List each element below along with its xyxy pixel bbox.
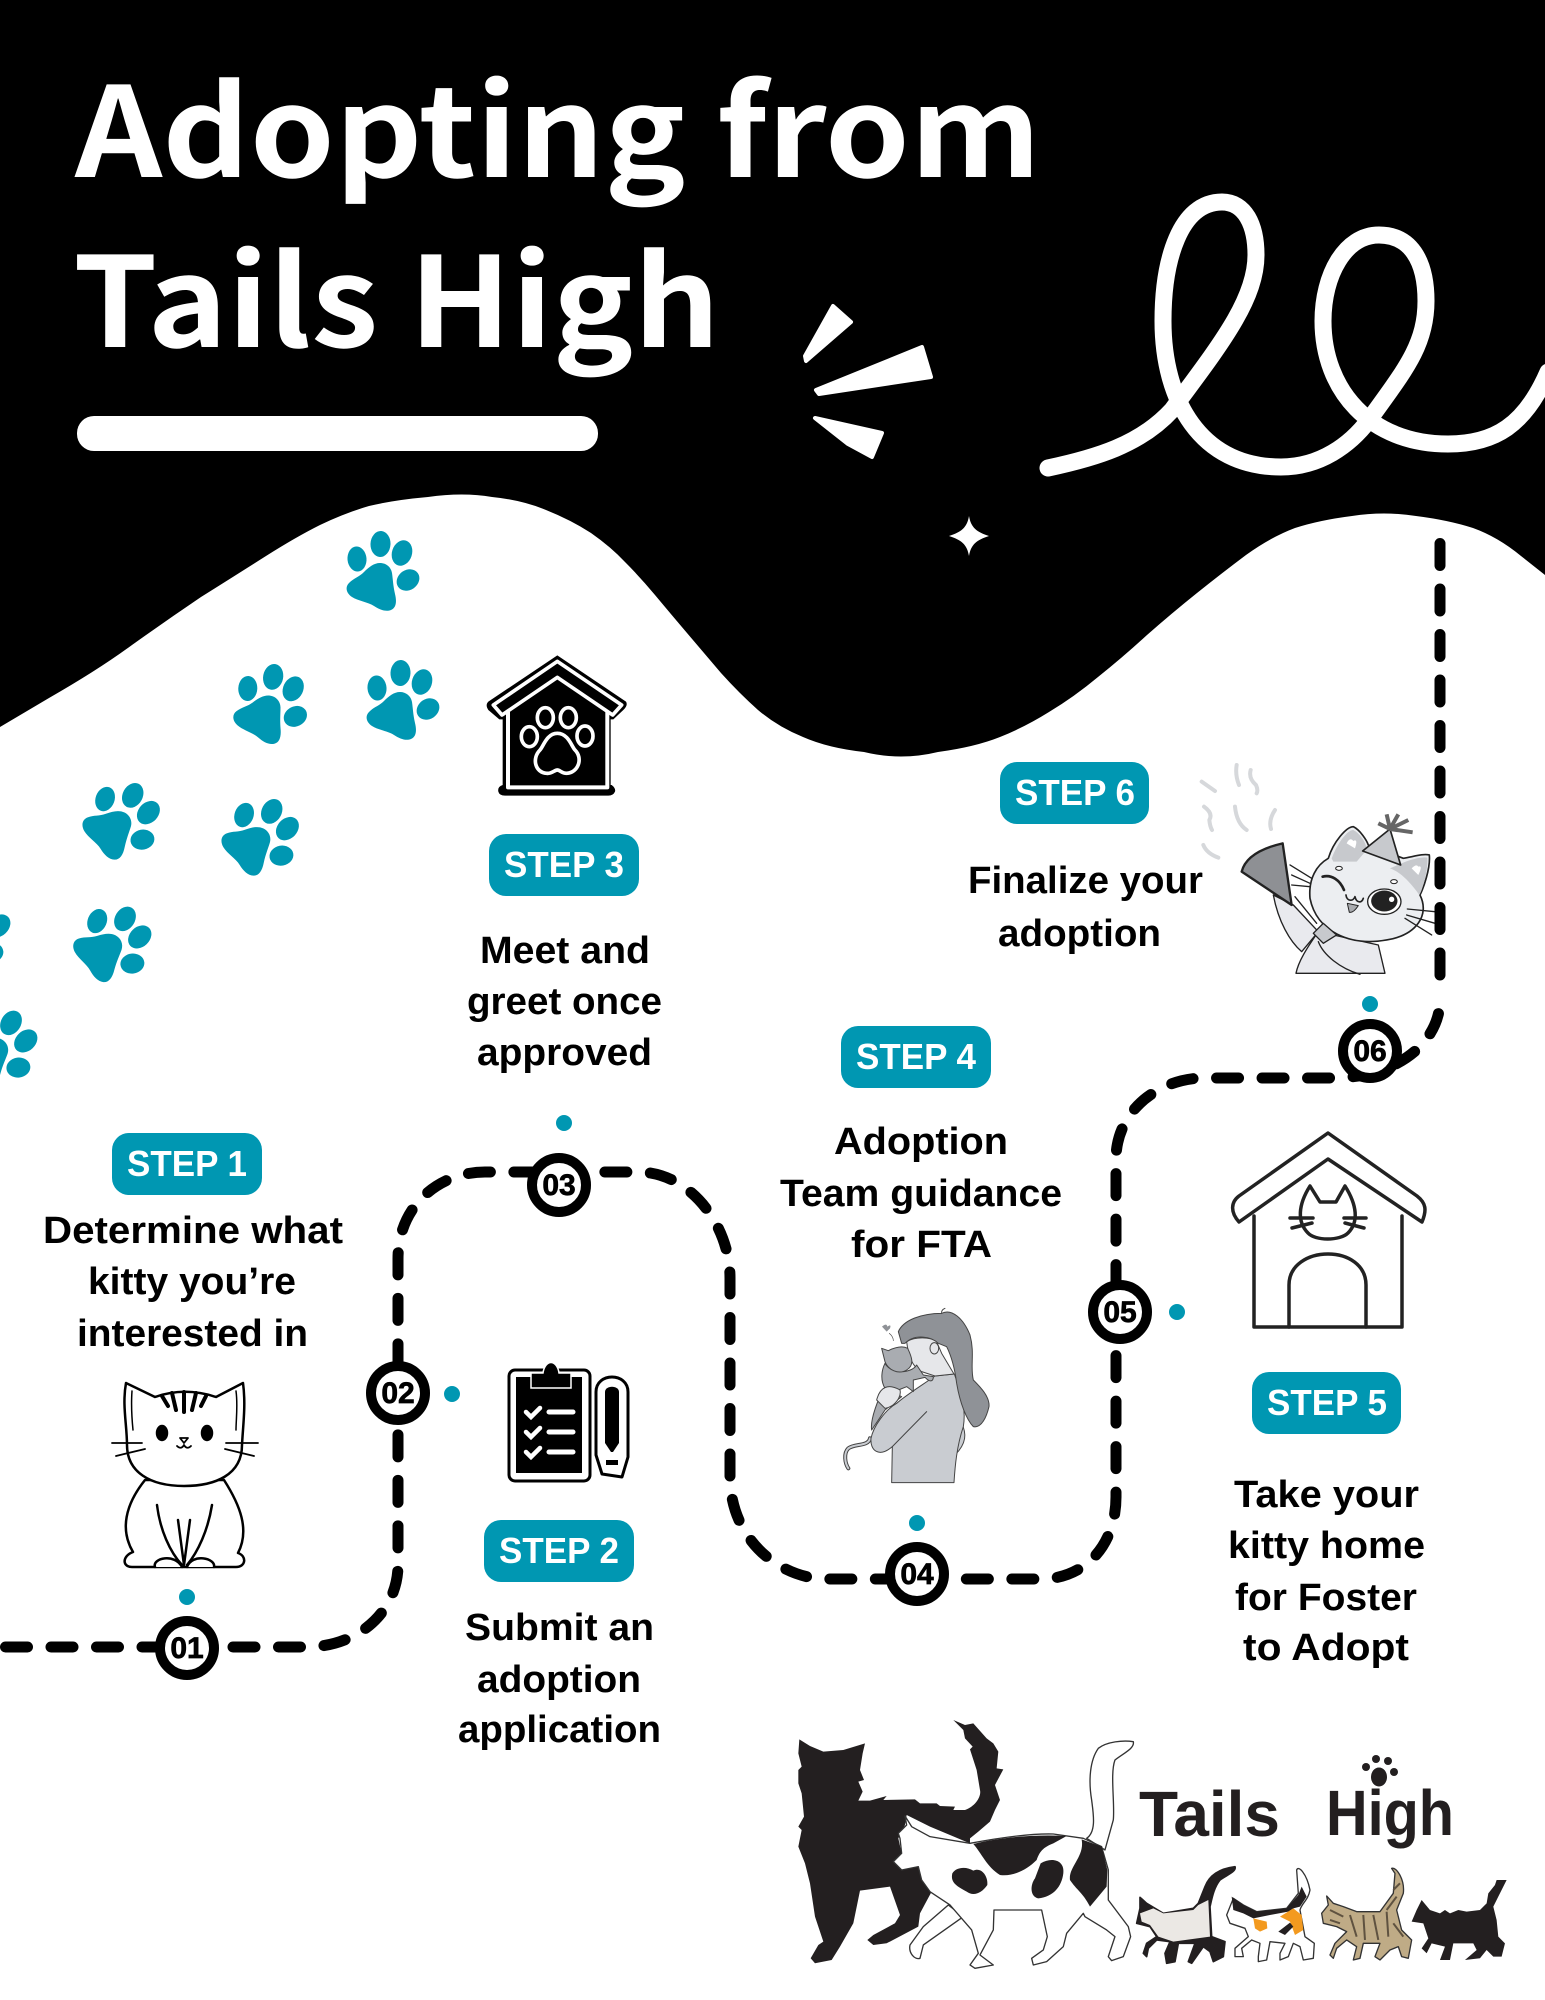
icon: step 1 kitten [112, 1383, 258, 1567]
step 4 badge [841, 1026, 991, 1088]
step 1 badge: STEP 1 [127, 1143, 247, 1184]
step 3 text: Meet and [480, 930, 650, 972]
node dot 04 [909, 1515, 925, 1531]
node 01 [160, 1621, 214, 1675]
step 1 text: kitty you’re [88, 1261, 296, 1303]
step 2 text: Submit an [465, 1607, 654, 1649]
title: Adopting from [74, 32, 1041, 213]
step 5 text: Take your [1234, 1474, 1419, 1516]
step 2 text: application [458, 1709, 661, 1751]
step 5 text: to Adopt [1243, 1627, 1409, 1669]
step 5 badge [1252, 1372, 1401, 1434]
step 5 text: for Foster [1235, 1577, 1417, 1619]
icon: step 4 woman hugging cat [845, 1308, 989, 1483]
step 3 badge: STEP 3 [504, 844, 624, 885]
step 1 badge [112, 1133, 262, 1195]
logo wordmark [1139, 1777, 1454, 1850]
title underline bar [77, 416, 598, 451]
logo wordmark: Tails [1139, 1778, 1280, 1850]
step 4 badge: STEP 4 [856, 1036, 976, 1077]
paw prints trail [0, 530, 444, 1102]
step 6 badge [1000, 762, 1149, 824]
step 1 text [43, 1210, 343, 1355]
node 02 [371, 1366, 425, 1420]
node 03: 03 [542, 1169, 576, 1202]
node 05: 05 [1103, 1296, 1137, 1329]
icon: white loop squiggle [1048, 202, 1545, 468]
icon: step 6 party cat [1202, 765, 1435, 974]
node 04: 04 [900, 1558, 934, 1591]
step 4 text: Adoption [834, 1121, 1008, 1163]
logo wordmark: High [1326, 1777, 1454, 1849]
icon: sparkle star [949, 516, 989, 556]
step 4 text: Team guidance [780, 1173, 1062, 1215]
step 6 text: adoption [998, 913, 1161, 955]
step 5 text: kitty home [1228, 1525, 1425, 1567]
logo large cats illustration [798, 1720, 1133, 1968]
node 05 [1093, 1285, 1147, 1339]
node dot 02 [444, 1386, 460, 1402]
step 2 text: adoption [477, 1659, 641, 1701]
node 03 [532, 1158, 586, 1212]
node dot 01 [179, 1589, 195, 1605]
black header wave background [0, 0, 1545, 756]
node 06 [1343, 1024, 1397, 1078]
step 5 text [1228, 1474, 1425, 1669]
node 04 [890, 1547, 944, 1601]
icon: spark burst [805, 306, 931, 457]
node dot 06 [1362, 996, 1378, 1012]
icon: step 5 cat house [1233, 1133, 1425, 1327]
step 3 text: approved [477, 1032, 652, 1074]
logo small paw [1362, 1755, 1398, 1786]
step 4 text [780, 1121, 1062, 1266]
step 2 badge [484, 1520, 634, 1582]
step 2 text [458, 1607, 661, 1751]
node 06: 06 [1353, 1035, 1387, 1068]
step 5 badge: STEP 5 [1267, 1382, 1387, 1423]
node 02: 02 [381, 1377, 415, 1410]
logo small cats illustration [1137, 1867, 1507, 1963]
icon: step 3 paw house [487, 655, 627, 796]
step 3 text: greet once [467, 981, 662, 1023]
step 6 text [968, 860, 1203, 955]
step 1 text: Determine what [43, 1210, 343, 1252]
step 2 badge: STEP 2 [499, 1530, 619, 1571]
node 01: 01 [170, 1632, 204, 1665]
title [73, 32, 1041, 383]
node dot 03 [556, 1115, 572, 1131]
dashed journey path [0, 544, 1440, 1647]
step 4 text: for FTA [851, 1224, 992, 1266]
step 6 text: Finalize your [968, 860, 1203, 902]
step 1 text: interested in [77, 1313, 308, 1355]
logo: Tails High [798, 1720, 1507, 1968]
step 6 badge: STEP 6 [1015, 772, 1135, 813]
icon: step 2 clipboard and tube [509, 1362, 628, 1481]
title: Tails High [73, 202, 720, 383]
step 3 badge [489, 834, 639, 896]
step 3 text [467, 930, 662, 1074]
node dot 05 [1169, 1304, 1185, 1320]
